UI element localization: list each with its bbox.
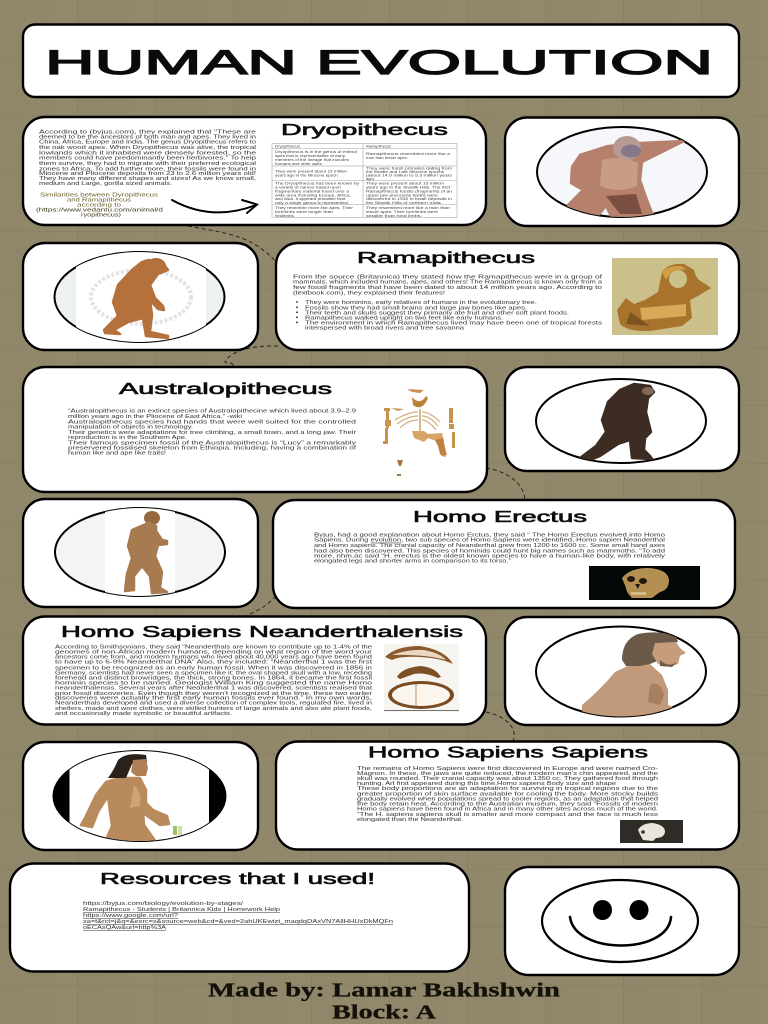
table: Dryopithecus vs Ramapithecus: They resemble more like apes. Their: [275, 206, 354, 210]
icon: Homo Erectus figure: [105, 505, 175, 600]
table: Dryopithecus vs Ramapithecus: members of the lineage that includes: [275, 158, 349, 162]
text block: Ramapithecus description: From the source (Britannica) they stated how the Ramapithecus were in a group of: [293, 274, 603, 280]
panel: Homo Sapiens illustration: [23, 742, 258, 850]
connector: Australopithecus to Homo Erectus: [486, 468, 525, 502]
text block: Neanderthalensis description: and occasionally made symbolic or beautiful artifacts.: [55, 711, 232, 717]
text block: resource links: Ramapithecus - Students | Britannica Kids | Homework Help: [83, 907, 280, 913]
text block: Ramapithecus description: few fossil fragments that have been dated to about 14 million years ago. According to: [293, 285, 603, 291]
bullet list: Ramapithecus features: Their teeth and skulls suggest they primarily ate fruit and other soft plant foods.: [305, 310, 569, 316]
heading: Homo Erectus: Homo Erectus: [413, 509, 587, 526]
text block: Neanderthalensis description: neanderthalensis. Several years after Neanderthal 1 was discovered, scientists realised that: [55, 686, 372, 692]
text block: resource links: sa=t&rct=j&q=&esrc=s&source=web&cd=&ved=2ahUKEwizt_maqdqDAxVN7AllHHUxDkMQFn: [83, 919, 393, 925]
table: Dryopithecus vs Ramapithecus: [272, 144, 457, 218]
text block: Australopithecus description: “Australopithecus is an extinct species of Australopithecine which lived about 3.9–2.9: [68, 409, 356, 415]
table: Dryopithecus vs Ramapithecus: They were present about 15 million: [366, 182, 444, 186]
text block: Dryopithecus description: China, Africa, Europe and India. The genus Dryopithecus refers to: [39, 140, 257, 146]
caption: similarities source: [36, 193, 163, 219]
panel: Ramapithecus illustration: [23, 243, 258, 350]
text block: Dryopithecus description: [39, 130, 257, 187]
text block: Homo Erectus description: Byjus, had a good explanation about Homo Erctus, they said “ The Homo Erectus evolved into Homo: [314, 532, 666, 538]
connector: Neanderthalensis to Sapiens: [486, 712, 514, 744]
text block: Ramapithecus description: mammals, which included humans, apes, and others! The Ramapithecus is known only from a: [293, 280, 603, 286]
text block: Neanderthalensis description: to have up to 6-9% Neanderthal DNA” Also, they included: “Neanderthal 1 was the first: [55, 660, 373, 666]
panel: Homo Erectus: [273, 500, 735, 608]
table: Dryopithecus vs Ramapithecus: years ago in the Miocene epoch.: [275, 174, 339, 178]
icon: Homo Sapiens figure: [70, 748, 209, 844]
text block: Australopithecus description: preservered fossilised skeleton from Ethiopia. Including, having a combination of: [68, 446, 356, 452]
table: Dryopithecus vs Ramapithecus: man than lesser apes.: [366, 156, 408, 160]
bullet list: Ramapithecus features: [296, 300, 602, 331]
text block: Homo Sapiens Sapiens description: “The H. sapiens sapiens skull is smaller and more compact and the face is much less: [357, 812, 658, 818]
text block: resource links: [83, 901, 393, 931]
image: Neanderthal skull caps: [384, 644, 459, 712]
credit: block: Block: A: [332, 1002, 436, 1024]
panel: Australopithecus illustration: [505, 367, 739, 471]
text block: Dryopithecus description: the oak wood apes. When Dryopithecus was alive, the tropical: [39, 145, 256, 151]
text block: Neanderthalensis description: hominin species to be named. Geologist William King suggested the name Homo: [55, 681, 373, 687]
text block: Australopithecus description: Australopithecus species had hands that were well suited for the controlled: [68, 419, 356, 425]
text block: Homo Sapiens Sapiens description: skull was rounded. Their cranial capacity was about 1350 cc. They gathered food through: [357, 776, 658, 782]
icon: Australopithecus figure: [580, 384, 654, 460]
text block: Dryopithecus description: According to (byjus.com), they explained that "These are: [39, 130, 257, 136]
icon: Dryopithecus ape: [568, 136, 684, 218]
table: Dryopithecus vs Ramapithecus: Dryopithecus is in the genus of extinct: [275, 150, 358, 154]
text block: Homo Erectus description: elongated legs and shorter arms in comparison to its torso.”: [314, 558, 511, 564]
table: Dryopithecus vs Ramapithecus: humans and other apes.: [275, 162, 323, 166]
text block: Australopithecus description: reproduction is in the Southern Ape.: [68, 435, 187, 441]
text block: Homo Sapiens Sapiens description: The remains of Homo Sapiens were first discovered in Europe and were named Cro-: [357, 766, 658, 772]
text block: Dryopithecus description: them survive, they had to migrate with their preferred ecological: [39, 161, 256, 167]
caption: similarities source: (https://www.vedantu.com/animal/d: [36, 207, 163, 213]
panel: Ramapithecus: [276, 243, 739, 350]
table: Dryopithecus vs Ramapithecus: smaller than hind limbs.: [366, 214, 422, 218]
text block: Neanderthalensis description: discoveries were actually the first early human fossils ever found.” In my own words,: [55, 696, 373, 702]
text block: Neanderthalensis description: [55, 644, 373, 717]
table: Dryopithecus vs Ramapithecus: the Middle and Late Miocene epochs: [366, 170, 444, 174]
connector: Ramapithecus to Australopithecus: [225, 346, 278, 368]
table: Dryopithecus vs Ramapithecus: upper jaw and some teeth) were: [366, 194, 438, 198]
table: Dryopithecus vs Ramapithecus: wide area including Europe, Africa,: [275, 194, 351, 198]
text block: Homo Erectus description: had also been discovered. This species of hominids could hunt big names such as mammoths. “To add: [314, 548, 665, 554]
panel: Neanderthal illustration: [505, 617, 739, 725]
image: Homo Erectus skull: [589, 566, 700, 600]
table: Dryopithecus vs Ramapithecus: Ramapithecus fossils (fragments of an: [366, 190, 452, 194]
arrow: caption to table: [172, 200, 257, 213]
panel: Homo Erectus illustration: [23, 499, 258, 607]
heading: Homo Sapiens Neanderthalensis: Homo Sapiens Neanderthalensis: [61, 624, 463, 641]
table: Dryopithecus vs Ramapithecus: fragmentary material found over a: [275, 190, 350, 194]
table: Dryopithecus vs Ramapithecus: (about 14.0 million to 5.3 million years: [366, 174, 452, 178]
table: Dryopithecus vs Ramapithecus: a variety of names based upon: [275, 186, 341, 190]
text block: Dryopithecus description: zones to Africa. To add further more, their fossils were found in: [39, 166, 256, 172]
title text: HUMAN EVOLUTION: [45, 44, 713, 82]
text block: Neanderthalensis description: Neanderthals developed and used a diverse collection of complex tools, regulated fire, lived in: [55, 701, 372, 707]
text block: Homo Erectus description: and Homo sapiens. The cranial capacity of Neanderthal grew from 1200 to 1600 cc. Some small hand axes: [314, 543, 665, 549]
text block: resource links: https://byjus.com/biology/evolution-by-stages/: [83, 901, 244, 907]
text block: resource links: https://www.google.com/url?: [83, 913, 178, 919]
text block: Australopithecus description: [68, 409, 356, 456]
text block: Neanderthalensis description: genomes of non-African modern humans, depending on what region of the word your: [55, 649, 372, 655]
table: Dryopithecus vs Ramapithecus: years ago in the Siwalik Hills. The first: [366, 186, 451, 190]
text block: Neanderthalensis description: According to Smithsonians, they said “Neanderthals are known to contribute up to 1-4% of the: [55, 644, 373, 650]
text block: Australopithecus description: Their genetics were adaptations for tree climbing, a small brain, and a long jaw. Their: [68, 430, 356, 436]
connector: Homo Erectus to Neanderthalensis: [240, 596, 276, 618]
text block: Australopithecus description: manipulation of objects in technology.: [68, 425, 193, 431]
table: Dryopithecus vs Ramapithecus: Ramapithecus resembled more like a: [366, 152, 451, 156]
text block: Homo Erectus description: more, nhm.ac said “H. erectus is the oldest known species to have a human-like body, with relatively: [314, 553, 665, 559]
text block: Neanderthalensis description: shelters, made and wore clothes, were skilled hunters of large animals and also ate plant foods,: [55, 706, 372, 712]
table: Dryopithecus vs Ramapithecus: only a single genus is represented.: [275, 201, 349, 205]
text block: Dryopithecus description: medium and Large, gorilla sized animals.: [39, 181, 172, 187]
heading: Homo Sapiens Sapiens: Homo Sapiens Sapiens: [368, 744, 648, 762]
table: Dryopithecus vs Ramapithecus: apes that is representative of early: [275, 154, 345, 158]
table: Dryopithecus vs Ramapithecus: The Dryopithecus has been known by: [275, 182, 359, 186]
panel: Resources: [10, 864, 469, 972]
caption: similarities source: Similarities between Dyropithecus: [40, 193, 158, 199]
panel: Homo Sapiens Sapiens: [276, 742, 739, 850]
text block: Homo Erectus description: Sapiens. During evolution , two sub species of Homo Sapiens were identified, Homo sapien Neanderthal: [314, 538, 665, 544]
text block: Dryopithecus description: lowlands which it inhabited were densely forested, so the: [39, 150, 257, 156]
text block: Homo Sapiens Sapiens description: Magnon. In these, the jaws are quite reduced, the modern man’s chin appeared, and the: [357, 771, 659, 777]
text block: Homo Sapiens Sapiens description: greater proportion of skin surface available for cooling the body. More stocky builds: [357, 791, 658, 797]
text block: Dryopithecus description: Miocene and Pliocene deposits from 23 to 2.6 million years old!: [39, 171, 256, 177]
text block: Homo Sapiens Sapiens description: Homo sapiens have been found in Africa and in many other sites across much of the world.: [357, 807, 658, 813]
text block: Ramapithecus description: (textbook.com), they explained their features!: [293, 290, 445, 296]
table: Dryopithecus vs Ramapithecus: They were present about 15 million: [275, 170, 347, 174]
text block: Homo Sapiens Sapiens description: [357, 766, 659, 823]
table: Dryopithecus vs Ramapithecus: hindlimbs.: [275, 214, 295, 218]
heading: Dryopithecus: Dryopithecus: [281, 122, 448, 139]
heading: Australopithecus: Australopithecus: [119, 381, 332, 398]
panel: smiley: [505, 867, 739, 975]
caption: similarities source: ryopithecus): [81, 213, 121, 219]
caption: similarities source: and Ramapithecus: [67, 198, 131, 204]
text block: Neanderthalensis description: ancestors come from, and modern humans who lived about 40,000 years ago have been found: [55, 655, 372, 661]
bullet list: Ramapithecus features: The environment in which Ramapithecus lived may have been one of tropical forests: [305, 320, 602, 326]
panel: Dryopithecus illustration: [505, 118, 739, 226]
table: Dryopithecus vs Ramapithecus: discovered in 1932 in fossil deposits in: [366, 197, 452, 201]
image: Homo Sapiens skull: [620, 820, 683, 843]
text block: Dryopithecus description: deemed to be the ancestors of both man and apes. They lived in: [39, 134, 256, 140]
text block: Dryopithecus description: They have many different shapes and sizes! As we know small,: [39, 176, 256, 182]
text block: Ramapithecus description: [293, 274, 603, 296]
connector: Dryopithecus to Ramapithecus: [188, 226, 276, 262]
bullet list: Ramapithecus features: interspersed with broad rivers and tree savanna: [305, 325, 465, 331]
text block: Homo Erectus description: [314, 532, 666, 564]
text block: Homo Sapiens Sapiens description: gradually evolved when populations spread to cooler regions, as an adaptation that helped: [357, 797, 658, 803]
text block: Homo Sapiens Sapiens description: These body proportions are an adaptation for surviving in tropical regions due to the: [357, 786, 659, 792]
credit: author: Made by: Lamar Bakhshwin: [208, 980, 560, 1002]
text block: Homo Sapiens Sapiens description: the body retain heat. According to the Australian museum, they said “Fossils of modern: [357, 802, 658, 808]
text block: Australopithecus description: Their famous specimen fossil of the Australopithecus is “Lucy” a remarkably: [68, 440, 356, 446]
image: Ramapithecus skull: [612, 258, 718, 335]
text block: Australopithecus description: human like and ape like traits!: [68, 450, 166, 456]
title banner: [23, 24, 739, 97]
text block: Neanderthalensis description: specimen to be recognized as an early human fossil. When it was discovered in 1856 in: [55, 665, 372, 671]
icon: Neanderthal man: [582, 632, 686, 720]
bullet list: Ramapithecus features: Fossils show they had small brains and large jaw bones like apes.: [305, 305, 527, 311]
text block: Neanderthalensis description: prior fossil discoveries. Even though they weren’t recognized at the time, these two earlier: [55, 691, 372, 697]
heading: Ramapithecus: Ramapithecus: [357, 250, 535, 267]
text block: resource links: oECAsQAw&url=http%3A: [83, 925, 167, 931]
text block: Neanderthalensis description: forehead and distinct browridges, the thick, strong bones. In 1864, it became the first fossil: [55, 675, 372, 681]
table: Dryopithecus vs Ramapithecus: lesser apes. Their forelimbs were: [366, 210, 438, 214]
panel: Homo Sapiens Neanderthalensis: [23, 616, 486, 724]
bullet list: Ramapithecus features: They were hominins, early relatives of humans in the evolutionary tree.: [305, 300, 537, 306]
table: Dryopithecus vs Ramapithecus: Ramapithecus: [366, 144, 391, 148]
table: Dryopithecus vs Ramapithecus: Dryopithecus: [275, 144, 300, 148]
text block: Dryopithecus description: members could have predominantly been herbivores." To help: [39, 156, 257, 162]
panel: Australopithecus: [23, 367, 487, 492]
image: Lucy skeleton: [383, 389, 455, 476]
caption: similarities source: according to: [77, 203, 121, 209]
panel: Dryopithecus: [23, 117, 486, 225]
heading: Resources: Resources that I used!: [100, 871, 375, 888]
text block: Neanderthalensis description: Germany, scientists had never seen a specimen like it: the oval shaped skull with a low, receding: [55, 670, 372, 676]
table: Dryopithecus vs Ramapithecus: forelimbs were longer than: [275, 210, 333, 214]
table: Dryopithecus vs Ramapithecus: They resembled more like a man than: [366, 206, 450, 210]
table: Dryopithecus vs Ramapithecus: They were fossil primates dating from: [366, 166, 452, 170]
text block: Homo Sapiens Sapiens description: elongated than the Neanderthal.: [357, 817, 463, 823]
icon: smiley face: [542, 880, 698, 962]
text block: Homo Sapiens Sapiens description: hunting. Art first appeared during this time.Homo sapiens Body size and shape: [357, 781, 617, 787]
icon: Ramapithecus figure: [76, 250, 206, 345]
table: Dryopithecus vs Ramapithecus: ago).: [366, 177, 375, 181]
text block: Australopithecus description: million years ago in the Pliocene of East Africa.” -wiki: [68, 414, 242, 420]
bullet list: Ramapithecus features: Ramapithecus walked upright on two feet like early humans.: [305, 315, 503, 321]
table: Dryopithecus vs Ramapithecus: the Siwalik Hills of northern India.: [366, 201, 442, 205]
table: Dryopithecus vs Ramapithecus: and Asia, it appears probable that: [275, 197, 346, 201]
